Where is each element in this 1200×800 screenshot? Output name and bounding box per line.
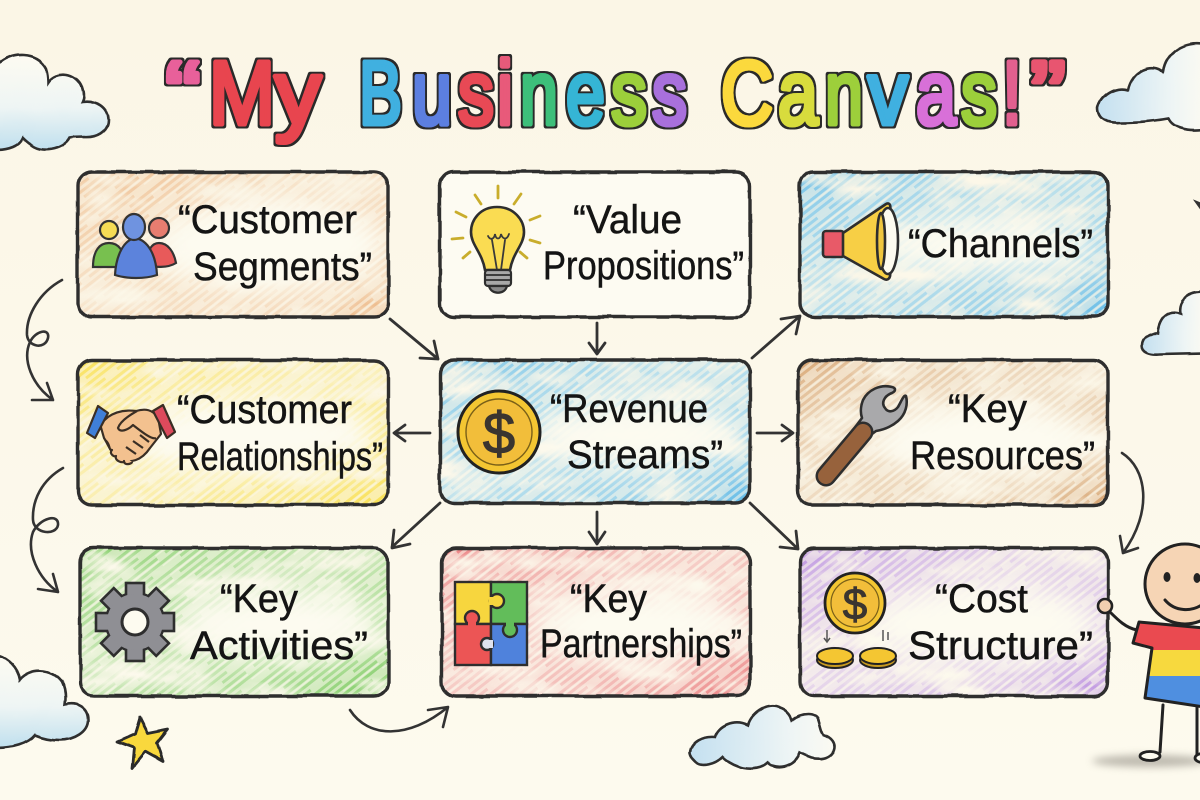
icon: wrench: [826, 386, 907, 476]
panel: cost structure: [794, 542, 1114, 702]
label: “Key: [948, 387, 1027, 431]
title: y: [275, 44, 321, 144]
panel: customer segments: [72, 166, 394, 323]
arrow: revenue streams to key activities: [392, 503, 440, 548]
arrow: value propositions to revenue streams: [589, 323, 605, 354]
label: [550, 387, 723, 477]
panel: key resources: [792, 354, 1114, 511]
hand: [1098, 599, 1112, 613]
head: [1145, 544, 1200, 624]
box outline: [80, 548, 388, 696]
crayon fill: [81, 548, 388, 696]
label: Relationships”: [177, 435, 383, 479]
panel: revenue streams: [434, 354, 756, 509]
box outline: [800, 172, 1108, 317]
icon: dollar coin: $: [483, 401, 515, 466]
crayon fill: [79, 360, 388, 504]
arrow: resources to cost structure: [1120, 453, 1143, 553]
title: i: [497, 44, 513, 144]
box outline: [442, 548, 750, 696]
icon: star: [117, 717, 168, 768]
panel: key activities: [74, 542, 394, 702]
arrow: looped segments to relationships: [27, 280, 62, 400]
ground shadow: [1092, 755, 1200, 767]
title: u: [412, 44, 452, 144]
crayon fill: [78, 173, 388, 316]
label: Segments”: [193, 245, 372, 289]
label: [540, 577, 742, 666]
title: M: [209, 44, 275, 144]
label: [908, 577, 1093, 668]
panel: value propositions: [440, 172, 750, 317]
label: [910, 387, 1095, 478]
panel: customer relationships: [72, 354, 394, 511]
title: s: [961, 44, 997, 144]
icon: three people: [93, 214, 176, 278]
label: “Key: [570, 577, 647, 621]
title: B: [359, 44, 402, 144]
cloud: bottom centre: [690, 706, 835, 769]
label: Resources”: [910, 434, 1095, 478]
arrow: revenue streams to channels: [752, 316, 800, 358]
title: !: [1002, 44, 1022, 144]
arrow: revenue streams to cost structure: [750, 503, 798, 549]
eyes: [1164, 572, 1200, 583]
cloud: top left: [0, 55, 108, 150]
title: s: [458, 44, 494, 144]
title: n: [825, 44, 863, 144]
label: [177, 388, 383, 479]
rainbow shirt: [1133, 622, 1200, 707]
panel: channels: [794, 166, 1114, 323]
title: [165, 44, 1066, 144]
box outline: [78, 360, 388, 505]
title: a: [916, 44, 957, 144]
crayon fill: [800, 172, 1108, 316]
title: a: [778, 44, 819, 144]
box outline: [78, 172, 388, 317]
icon: handshake: [87, 405, 175, 464]
label: Partnerships”: [540, 622, 742, 666]
label: Propositions”: [543, 244, 744, 288]
stick figure: [1092, 544, 1200, 767]
title: ”: [1030, 44, 1066, 144]
label: “Channels”: [908, 222, 1093, 266]
title: “: [165, 44, 201, 144]
arrow: revenue streams to customer relationships: [394, 425, 430, 441]
arrow: activities to partnerships: [350, 707, 448, 731]
arrow: tip at right edge: [1195, 201, 1200, 208]
label: [190, 577, 368, 668]
box outline: [800, 548, 1108, 696]
icon: gear: [96, 583, 174, 661]
arrow: revenue streams to key partnerships: [589, 512, 605, 544]
label: “Customer: [178, 198, 357, 242]
icon: light bulb: [452, 186, 540, 293]
label: “Value: [573, 198, 682, 242]
label: Structure”: [908, 624, 1093, 668]
arrow: revenue streams to key resources: [757, 425, 793, 441]
cloud: bottom left: [0, 655, 88, 748]
title: n: [520, 44, 558, 144]
crayon fill: [799, 360, 1107, 504]
title: v: [868, 44, 908, 144]
raised arm: [1110, 612, 1137, 630]
label: “Key: [220, 577, 298, 621]
panel: key partnerships: [436, 542, 756, 702]
crayon fill: [801, 548, 1108, 696]
arrow: looped relationships to activities: [31, 468, 63, 592]
icon: puzzle: [455, 582, 527, 665]
arrow: customer segments to revenue streams: [390, 319, 438, 359]
box outline: [440, 172, 750, 317]
label: “Revenue: [550, 387, 708, 431]
label: “Cost: [935, 577, 1028, 621]
icon: coins: [817, 573, 896, 668]
box outline: [798, 360, 1108, 505]
label: Streams”: [567, 433, 723, 477]
crayon fill: [440, 360, 749, 502]
label: [178, 198, 372, 289]
icon: coins: $: [843, 580, 867, 629]
crayon fill: [442, 548, 750, 695]
box outline: [440, 360, 750, 503]
label: “Customer: [177, 388, 352, 432]
title: e: [566, 44, 605, 144]
cloud: right middle: [1142, 292, 1200, 354]
cloud: top right: [1098, 43, 1200, 131]
smile: [1165, 600, 1200, 610]
title: s: [611, 44, 647, 144]
label: [543, 198, 744, 288]
legs: [1160, 705, 1197, 756]
title: C: [721, 44, 773, 144]
title: s: [652, 44, 687, 144]
icon: dollar coin: [458, 391, 540, 473]
icon: megaphone: [823, 203, 898, 280]
label: Activities”: [190, 624, 368, 668]
feet: [1140, 752, 1200, 762]
